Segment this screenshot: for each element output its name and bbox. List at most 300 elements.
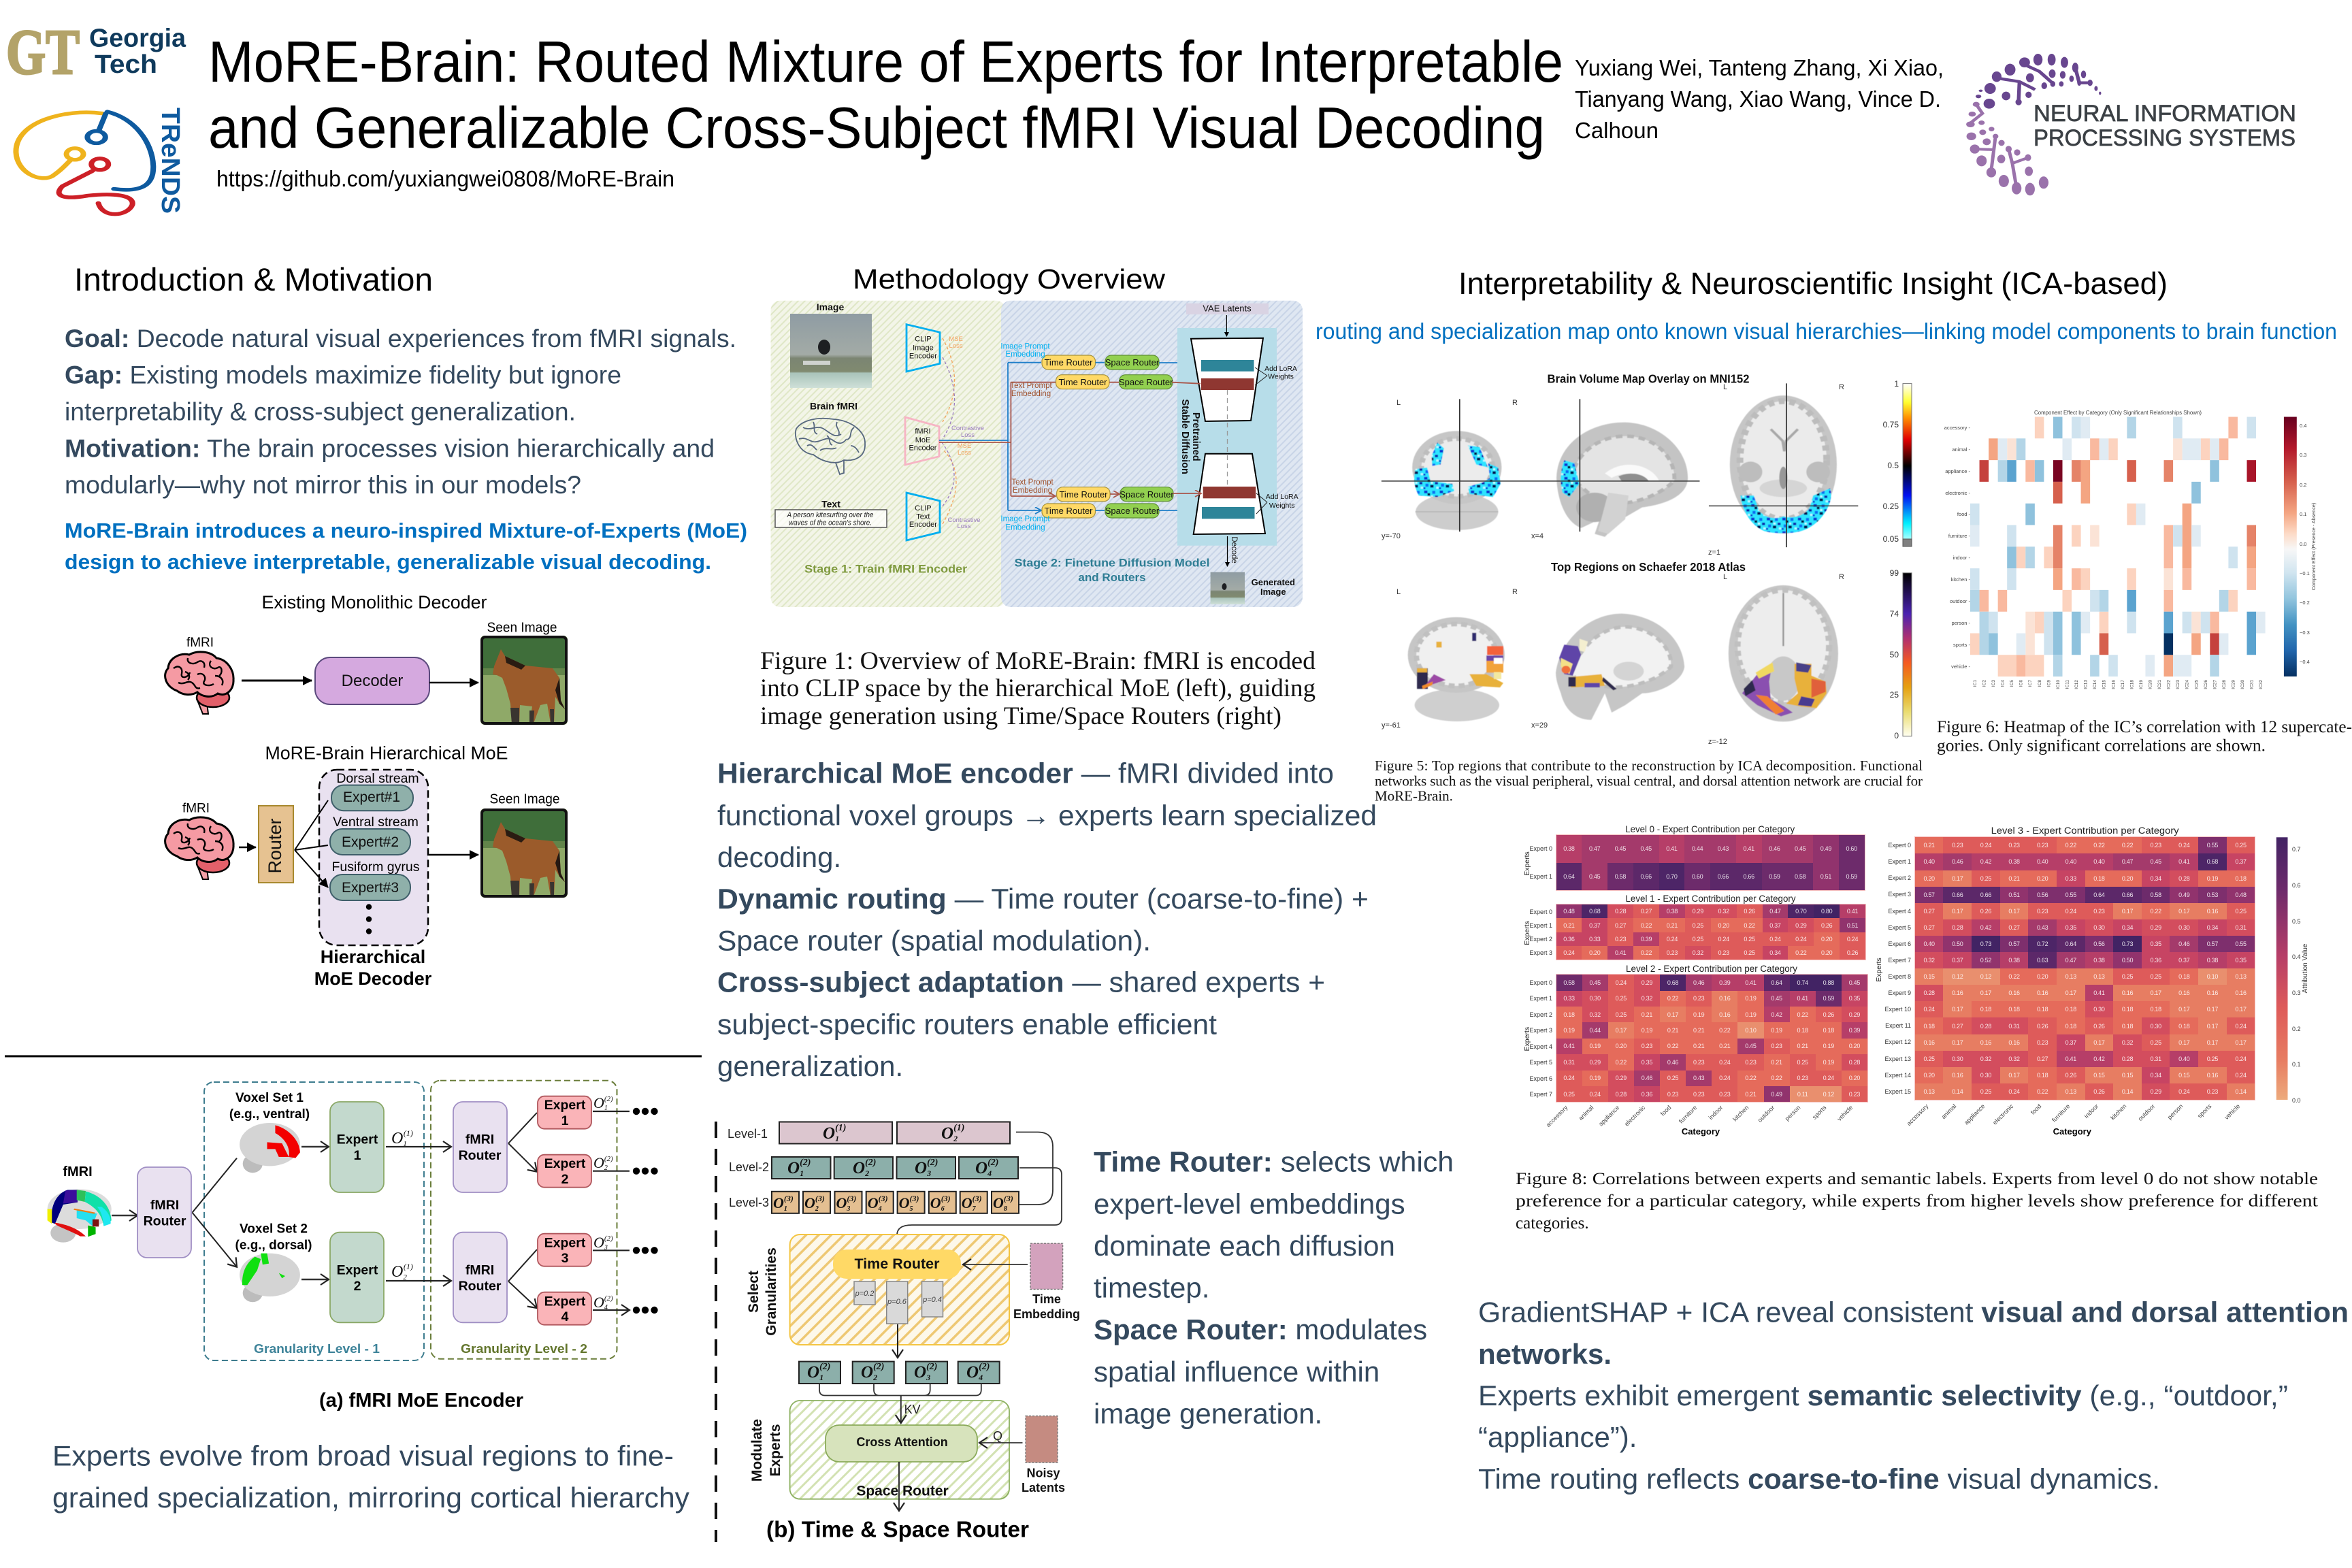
text block: time router and space router: image generation. (1094, 1398, 1322, 1429)
heatmap: level 2 expert contribution: 0.41 (1797, 995, 1808, 1002)
diagram: fMRI MoE encoder: (2) (604, 1235, 613, 1243)
chart labels: level heatmaps: Level 1 - Expert Contribution per Category (1625, 893, 1795, 904)
caption: figure 8 (1516, 1170, 2318, 1232)
heatmap: level 1 expert contribution: 0.24 (1795, 936, 1806, 943)
heatmap: level 3 expert contribution: 0.17 (1952, 875, 1963, 882)
text block: time router and space router: spatial influence within (1094, 1356, 1379, 1388)
heatmap: level 3 expert contribution: 0.32 (2122, 1039, 2133, 1046)
diagram: fMRI MoE encoder: (2) (604, 1294, 613, 1303)
heatmap: level 2 expert contribution: 0.24 (1590, 1091, 1601, 1098)
text block: time router and space router: dominate each diffusion (1094, 1230, 1395, 1262)
diagram: existing monolithic decoder (165, 592, 568, 725)
diagram: time and space router: Level-2 (729, 1160, 769, 1174)
diagram: time and space router: (2) (819, 1362, 830, 1372)
colorbar: atlas: 99 (1890, 568, 1899, 578)
chart: IC correlation heatmap: electronic - (1945, 490, 1970, 496)
time and space routers: Space Router (1105, 357, 1160, 368)
heatmap: level 3 expert contribution: 0.18 (2122, 1022, 2133, 1029)
caption: figure 6: Figure 6: Heatmap of the IC’s correlation with 12 supercate- (1937, 718, 2352, 736)
chart: brain volume maps: y=-61 (1382, 721, 1401, 730)
heatmap: level 3 expert contribution: 0.34 (2151, 1072, 2161, 1079)
heatmap: level 3 expert contribution: 0.16 (2235, 990, 2247, 996)
chart: IC correlation heatmap: IC18 (2129, 680, 2134, 689)
heatmap: level 2 expert contribution: 0.25 (1616, 1011, 1627, 1018)
diagram: pipeline overview: Contrastive (947, 517, 981, 524)
heatmap: level 2 expert contribution: 0.22 (1667, 1043, 1678, 1049)
heatmap: level 3 expert contribution: 0.55 (2207, 842, 2218, 849)
heatmap: level 2 expert contribution: 0.29 (1590, 1059, 1601, 1066)
chart labels: level heatmaps: sports (1811, 1104, 1828, 1121)
heatmap: level 1 expert contribution (1556, 904, 1866, 960)
heatmap: level 3 expert contribution: 0.24 (1980, 842, 1991, 849)
heatmap: level 0 expert contribution: 0.45 (1589, 873, 1600, 880)
callout: MoRE-Brain statement: MoRE-Brain introduces a neuro-inspired Mixture-of-Experts (MoE) (65, 519, 747, 542)
heatmap: level 1 expert contribution: 0.47 (1769, 908, 1781, 915)
caption: figure 1 (760, 647, 1316, 730)
diagram: fMRI MoE encoder: 1 (354, 1148, 361, 1163)
heatmap: level 3 expert contribution: 0.50 (1952, 941, 1963, 947)
heatmap: level 0 expert contribution: 0.70 (1666, 873, 1678, 880)
heatmap: level 2 expert contribution: 0.24 (1719, 1075, 1730, 1081)
heatmap: level 2 expert contribution: 0.12 (1823, 1091, 1834, 1098)
chart: IC correlation heatmap: IC30 (2240, 680, 2245, 689)
heatmap: level 2 expert contribution: 0.33 (1563, 995, 1575, 1002)
diagram: fMRI MoE encoder: (1) (404, 1128, 413, 1138)
text block: experts evolve: Experts evolve from broad visual regions to fine- (52, 1440, 674, 1471)
chart labels: level heatmaps: food (1659, 1104, 1672, 1117)
diagram: time and space router: O (861, 1363, 873, 1382)
heatmap: level 3 expert contribution: 0.18 (2065, 1006, 2076, 1013)
heatmap: level 3 expert contribution: 0.32 (2008, 1056, 2020, 1062)
chart labels: level heatmaps: Expert 11 (1885, 1022, 1911, 1029)
diagram: existing monolithic decoder: Seen Image (487, 621, 557, 636)
heatmap: level 2 expert contribution: 0.74 (1797, 979, 1808, 986)
heatmap: level 1 expert contribution: 0.20 (1718, 922, 1729, 929)
heatmap: level 1 expert contribution: 0.23 (1615, 936, 1626, 943)
diagram: time and space router: (2) (926, 1362, 937, 1372)
caption: figure 8: Figure 8: Correlations between experts and semantic labels. Experts from level 0 do not show notable (1516, 1170, 2318, 1188)
heatmap: level 3 expert contribution: 0.16 (1952, 990, 1963, 996)
heatmap: level 3 expert contribution: 0.64 (2093, 892, 2105, 898)
text block: hierarchical encoder, routing, adaptation: decoding. (717, 841, 841, 873)
heatmap: level 0 expert contribution: 0.60 (1692, 873, 1703, 880)
chart: IC correlation heatmap: IC11 (2065, 680, 2070, 689)
chart: IC correlation heatmap: accessory - (1944, 425, 1971, 431)
colorbar: attribution value: 0.5 (2292, 918, 2301, 925)
heatmap: level 3 expert contribution: 0.28 (2122, 1056, 2133, 1062)
heatmap: level 3 expert contribution: 0.17 (2178, 1039, 2189, 1046)
heatmap: level 3 expert contribution: 0.25 (2207, 1056, 2218, 1062)
diagram: time and space router: Modulate (749, 1419, 765, 1482)
diagram: fMRI MoE encoder: fMRI (466, 1132, 494, 1147)
heatmap: level 2 expert contribution: 0.23 (1642, 1043, 1652, 1049)
heatmap: level 3 expert contribution: 0.17 (2008, 908, 2020, 915)
chart labels: level heatmaps: sports (2196, 1102, 2213, 1120)
diagram: time and space router: 8 (1004, 1205, 1007, 1213)
heatmap: level 2 expert contribution: 0.30 (1590, 995, 1601, 1002)
heatmap: level 3 expert contribution: 0.18 (2235, 875, 2247, 882)
diagram: time and space router: 3 (926, 1169, 931, 1178)
github link: https://github.com/yuxiangwei0808/MoRE-Brain (216, 166, 674, 191)
heatmap: level 1 expert contribution: 0.20 (1821, 949, 1832, 956)
heatmap: level 2 expert contribution: 0.28 (1616, 1091, 1627, 1098)
diagram: pipeline overview: Text Prompt (1011, 478, 1054, 487)
chart labels: level heatmaps: Expert 5 (1888, 924, 1911, 931)
heatmap: level 3 expert contribution: 0.47 (2065, 957, 2076, 964)
diagram: pipeline overview: MSE (949, 336, 963, 343)
heatmap: level 3 expert contribution: 0.66 (2122, 892, 2133, 898)
diagram: fMRI MoE encoder: (e.g., ventral) (229, 1107, 310, 1122)
caption: figure 5: MoRE-Brain. (1375, 788, 1453, 804)
heatmap: level 3 expert contribution: 0.25 (1923, 1056, 1935, 1062)
heatmap: level 2 expert contribution: 0.24 (1719, 1059, 1730, 1066)
chart labels: level heatmaps: Category (2053, 1126, 2092, 1137)
diagram: time and space router: Noisy (1026, 1466, 1060, 1480)
heatmap: level 1 expert contribution: 0.34 (1769, 949, 1781, 956)
heatmap: level 3 expert contribution: 0.17 (2122, 908, 2133, 915)
colorbar: component effect: Component Effect (Presence - Absence) (2310, 503, 2317, 590)
heatmap: level 3 expert contribution: 0.26 (1980, 908, 1991, 915)
colorbar: volume overlay: 0.05 (1883, 534, 1899, 544)
chart labels: level heatmaps: Expert 4 (1888, 908, 1911, 915)
chart labels: level heatmaps: furniture (2051, 1102, 2071, 1124)
text block: hierarchical encoder, routing, adaptation: Dynamic routing — Time router (coarse-to-fine) + (717, 883, 1369, 915)
text block: goal, gap, motivation: modularly—why not mirror this in our models? (65, 471, 581, 499)
text block: experts evolve (52, 1440, 689, 1514)
colorbar: component effect (2284, 416, 2317, 676)
diagram: time and space router: (2) (927, 1158, 938, 1168)
heatmap: level 3 expert contribution: 0.20 (1923, 875, 1935, 882)
heatmap: level 2 expert contribution: 0.20 (1616, 1043, 1627, 1049)
diagram: hierarchical MoE decoder: MoE Decoder (314, 968, 432, 989)
chart: IC correlation heatmap: IC1 (1973, 680, 1978, 687)
logo: Georgia Tech: Tech (95, 50, 157, 79)
heatmap: level 3 expert contribution: 0.17 (2151, 990, 2161, 996)
heatmap: level 0 expert contribution: 0.46 (1769, 845, 1780, 852)
chart: IC correlation heatmap: IC13 (2084, 680, 2089, 689)
text block: hierarchical encoder, routing, adaptation: Hierarchical MoE encoder — fMRI divided into (717, 757, 1334, 789)
caption: figure 1: into CLIP space by the hierarchical MoE (left), guiding (760, 674, 1316, 702)
heatmap: level 3 expert contribution: 0.47 (2122, 858, 2133, 865)
diagram: fMRI MoE encoder: 1 (604, 1105, 608, 1112)
heatmap: level 3 expert contribution: 0.26 (2093, 1088, 2105, 1095)
colorbar: attribution value: 0.4 (2292, 953, 2301, 960)
chart labels: level heatmaps: Expert 8 (1888, 973, 1911, 980)
diagram: fMRI MoE encoder: fMRI (150, 1198, 179, 1213)
heatmap: level 3 expert contribution: 0.28 (1923, 990, 1935, 996)
heatmap: level 2 expert contribution: 0.26 (1823, 1011, 1834, 1018)
logo: NeurIPS (1966, 54, 2296, 195)
diagram: time and space router: (3) (847, 1194, 856, 1203)
heatmap: level 3 expert contribution: 0.37 (2235, 858, 2247, 865)
chart labels: level heatmaps: Experts (1523, 921, 1531, 945)
heatmap: level 2 expert contribution: 0.46 (1693, 979, 1704, 986)
heatmap: level 3 expert contribution: 0.30 (2151, 1022, 2161, 1029)
heatmap: level 2 expert contribution: 0.64 (1771, 979, 1782, 986)
icon: line brain (796, 419, 865, 474)
heatmap: level 3 expert contribution: 0.22 (2065, 842, 2076, 849)
encoders: Encoder (909, 444, 937, 453)
heatmap: level 2 expert contribution: 0.11 (1797, 1091, 1808, 1098)
chart labels: level heatmaps: Expert 1 (1888, 858, 1911, 865)
chart labels: level heatmaps: kitchen (2109, 1102, 2127, 1122)
encoders: Text (916, 513, 930, 521)
heatmap: level 3 expert contribution: 0.24 (2178, 842, 2189, 849)
encoders: MoE (915, 436, 930, 444)
colorbar: component effect: −0.3 (2300, 630, 2310, 636)
chart: IC correlation heatmap: kitchen - (1951, 576, 1970, 583)
heatmap: level 3 expert contribution: 0.50 (2122, 957, 2133, 964)
heatmap: level 3 expert contribution: 0.26 (2065, 1072, 2076, 1079)
heatmap: level 1 expert contribution: 0.29 (1693, 908, 1703, 915)
diagram: fMRI MoE encoder: Expert (337, 1263, 378, 1278)
heatmap: level 1 expert contribution: 0.24 (1667, 936, 1678, 943)
heatmap: level 3 expert contribution: 0.27 (1923, 908, 1935, 915)
chart: IC correlation heatmap: IC21 (2157, 680, 2162, 689)
diagram: time and space router: O (868, 1194, 879, 1211)
heatmap: level 2 expert contribution: 0.21 (1693, 1043, 1704, 1049)
heatmap: level 3 expert contribution: 0.21 (2008, 875, 2020, 882)
heatmap: level 1 expert contribution: 0.70 (1795, 908, 1806, 915)
heatmap: level 3 expert contribution: 0.38 (2008, 858, 2020, 865)
heatmap: level 3 expert contribution: 0.18 (2122, 1006, 2133, 1013)
heatmap: level 2 expert contribution: 0.18 (1563, 1011, 1575, 1018)
heatmap: level 3 expert contribution: 0.37 (1952, 957, 1963, 964)
heatmap: level 3 expert contribution: 0.40 (2178, 1056, 2189, 1062)
heatmap: level 3 expert contribution: 0.17 (2207, 1039, 2218, 1046)
heatmap: level 1 expert contribution: 0.48 (1563, 908, 1575, 915)
text block: time router and space router: expert-level embeddings (1094, 1188, 1405, 1220)
chart labels: level heatmaps: Expert 2 (1529, 1011, 1552, 1018)
heatmap: level 3 expert contribution: 0.31 (2151, 1056, 2161, 1062)
heatmap: level 3 expert contribution: 0.23 (2037, 1039, 2048, 1046)
chart: IC correlation heatmap: sports - (1953, 642, 1970, 648)
diagram: time and space router: O (993, 1194, 1004, 1211)
heatmap: level 3 expert contribution: 0.38 (2008, 957, 2020, 964)
chart: brain volume maps: L (1396, 399, 1401, 407)
diagram: pipeline overview: A person kitesurfing over the (787, 511, 874, 519)
chart labels: level heatmaps (1523, 823, 2241, 1137)
logo: NeurIPS: PROCESSING SYSTEMS (2034, 125, 2296, 151)
heatmap: level 3 expert contribution: 0.17 (2008, 1072, 2020, 1079)
panel: space router: Cross Attention (856, 1435, 948, 1449)
diagram: existing monolithic decoder: fMRI (186, 636, 214, 650)
heatmap: level 3 expert contribution: 0.16 (1952, 1072, 1963, 1079)
diagram: time and space router: Level-1 (728, 1127, 768, 1141)
pretrained stable diffusion: Stable Diffusion (1179, 399, 1190, 474)
chart labels: level heatmaps: outdoor (2137, 1102, 2156, 1122)
heatmap: level 3 expert contribution: 0.30 (2093, 1006, 2105, 1013)
heatmap: level 3 expert contribution: 0.18 (2178, 973, 2189, 980)
heatmap: level 3 expert contribution: 0.16 (2207, 990, 2218, 996)
chart labels: level heatmaps: Expert 0 (1529, 845, 1552, 852)
chart: brain volume maps: L (1396, 588, 1401, 596)
heatmap: level 3 expert contribution: 0.26 (2093, 1022, 2105, 1029)
heatmap: level 3 expert contribution: 0.33 (2065, 875, 2076, 882)
diagram: pipeline overview: Image Prompt (1000, 515, 1050, 523)
heatmap: level 3 expert contribution: 0.42 (1980, 924, 1991, 931)
heatmap: level 3 expert contribution: 0.58 (2151, 892, 2161, 898)
time and space routers: Space Router (1120, 489, 1174, 500)
chart: brain volume maps: z=-12 (1708, 738, 1727, 746)
heatmap: level 3 expert contribution: 0.48 (2235, 892, 2247, 898)
heatmap: level 2 expert contribution: 0.17 (1616, 1027, 1627, 1034)
brain map: axial atlas (1729, 585, 1838, 721)
photo: generated image (1211, 572, 1245, 604)
heatmap: level 1 expert contribution: 0.20 (1589, 949, 1600, 956)
chart: IC correlation heatmap: animal - (1952, 446, 1970, 453)
heatmap: level 3 expert contribution: 0.68 (2207, 858, 2218, 865)
diagram: time and space router: Q (993, 1429, 1002, 1443)
diagram: fMRI MoE encoder: Router (459, 1279, 502, 1294)
heatmap: level 1 expert contribution: 0.80 (1821, 908, 1832, 915)
diagram: pipeline overview: Embedding (1013, 487, 1052, 495)
heatmap: level 1 expert contribution: 0.20 (1821, 936, 1832, 943)
callout: MoRE-Brain statement: design to achieve interpretable, generalizable visual decoding. (65, 550, 711, 574)
heatmap: level 3 expert contribution: 0.17 (2178, 1006, 2189, 1013)
heatmap: level 2 expert contribution: 0.23 (1667, 1091, 1678, 1098)
text block: interpretability findings: “appliance”). (1478, 1421, 1637, 1453)
diagram: time and space router: 6 (941, 1205, 945, 1213)
title (208, 30, 1563, 161)
heatmap: level 3 expert contribution: 0.30 (1980, 1072, 1991, 1079)
heatmap: level 2 expert contribution: 0.19 (1745, 1011, 1757, 1018)
heatmap: level 0 expert contribution: 0.66 (1640, 873, 1652, 880)
chart: brain volume maps: L (1723, 383, 1727, 391)
heatmap: level 2 expert contribution: 0.29 (1849, 1011, 1860, 1018)
heatmap: level 3 expert contribution: 0.15 (2178, 1072, 2189, 1079)
diagram: time and space router: Latents (1022, 1481, 1065, 1494)
diagram: pipeline overview: Image (1260, 587, 1286, 597)
chart labels: level heatmaps: Expert 6 (1529, 1075, 1552, 1082)
heatmap: level 3 expert contribution: 0.17 (2235, 1006, 2247, 1013)
colorbar: attribution value: 0.7 (2292, 846, 2301, 853)
diagram: hierarchical MoE decoder: Router (265, 818, 285, 874)
diagram: fMRI MoE encoder: Router (144, 1214, 186, 1229)
pretrained stable diffusion: Add LoRA (1264, 365, 1297, 373)
chart labels: level heatmaps: appliance (1963, 1102, 1986, 1126)
panel: time router: p=0.2 (855, 1290, 874, 1298)
pretrained stable diffusion: Add LoRA (1266, 493, 1298, 501)
heatmap: level 3 expert contribution: 0.26 (2037, 1022, 2048, 1029)
heatmap: level 3 expert contribution: 0.17 (2178, 908, 2189, 915)
heatmap: level 3 expert contribution: 0.21 (1923, 842, 1935, 849)
heatmap: level 0 expert contribution: 0.58 (1615, 873, 1626, 880)
heatmap: level 1 expert contribution: 0.25 (1693, 936, 1703, 943)
chart: IC correlation heatmap: IC2 (1982, 680, 1987, 687)
chart: brain volume maps: R (1839, 573, 1844, 581)
chart: brain volume maps: x=29 (1531, 721, 1548, 730)
heading: Interpretability & Neuroscientific Insight: Interpretability & Neuroscientific Insight (ICA-based) (1458, 266, 2168, 301)
heatmap: level 2 expert contribution: 0.22 (1667, 995, 1678, 1002)
heatmap: level 1 expert contribution: 0.24 (1563, 949, 1575, 956)
title: and Generalizable Cross-Subject fMRI Visual Decoding (208, 96, 1545, 161)
heatmap: level 1 expert contribution: 0.32 (1693, 949, 1703, 956)
diagram: hierarchical MoE decoder: Hierarchical (321, 947, 425, 967)
diagram: time and space router: O (941, 1124, 953, 1143)
diagram: fMRI MoE encoder: 2 (403, 1273, 407, 1281)
heatmap: level 2 expert contribution: 0.29 (1616, 1075, 1627, 1081)
heatmap: level 3 expert contribution: 0.23 (1952, 842, 1963, 849)
chart: IC correlation heatmap (1944, 410, 2317, 689)
diagram: pipeline overview: Image Prompt (1000, 343, 1050, 351)
heatmap: level 2 expert contribution: 0.23 (1771, 1043, 1782, 1049)
chart labels: level heatmaps: food (2029, 1102, 2042, 1116)
heatmap: level 3 expert contribution: 0.28 (2178, 875, 2189, 882)
heatmap: level 3 expert contribution: 0.25 (2235, 842, 2247, 849)
heatmap: level 1 expert contribution: 0.24 (1769, 936, 1781, 943)
heatmap: level 2 expert contribution: 0.20 (1849, 1075, 1860, 1081)
heatmap: level 0 expert contribution: 0.41 (1743, 845, 1754, 852)
heatmap: level 2 expert contribution: 0.44 (1590, 1027, 1601, 1034)
chart labels: level heatmaps: Expert 15 (1884, 1088, 1911, 1095)
encoders: Encoder (909, 521, 937, 529)
heatmap: level 3 expert contribution: 0.22 (2151, 908, 2161, 915)
heatmap: level 3 expert contribution: 0.29 (2151, 924, 2161, 931)
text block: interpretability findings (1478, 1296, 2349, 1495)
colorbar: attribution value: 0.1 (2292, 1061, 2301, 1068)
heatmap: level 3 expert contribution: 0.14 (2122, 1088, 2133, 1095)
chart: IC correlation heatmap: indoor - (1953, 555, 1970, 561)
heatmap: level 1 expert contribution: 0.27 (1641, 908, 1652, 915)
heatmap: level 3 expert contribution: 0.13 (2065, 1088, 2076, 1095)
heatmap: level 2 expert contribution: 0.23 (1745, 1059, 1757, 1066)
heatmap: level 2 expert contribution: 0.19 (1745, 995, 1757, 1002)
heatmap: level 3 expert contribution: 0.10 (2207, 973, 2218, 980)
heatmap: level 3 expert contribution: 0.18 (2037, 1072, 2048, 1079)
diagram: time and space router: 3 (846, 1205, 850, 1213)
heatmap: level 3 expert contribution: 0.23 (2151, 842, 2161, 849)
heatmap: level 1 expert contribution: 0.68 (1589, 908, 1600, 915)
time and space routers: Time Router (1059, 489, 1108, 500)
heatmap: level 3 expert contribution: 0.17 (2093, 1039, 2105, 1046)
chart labels: level heatmaps: electronic (1623, 1104, 1647, 1128)
heatmap: level 2 expert contribution: 0.19 (1590, 1043, 1601, 1049)
heatmap: level 3 expert contribution: 0.17 (1952, 1006, 1963, 1013)
heatmap: level 2 expert contribution: 0.24 (1823, 1075, 1834, 1081)
diagram: fMRI MoE encoder: 4 (604, 1304, 608, 1311)
diagram: time and space router: 2 (864, 1169, 869, 1178)
diagram: fMRI MoE encoder: 3 (561, 1251, 569, 1266)
heatmap: level 3 expert contribution: 0.15 (1923, 973, 1935, 980)
heatmap: level 3 expert contribution: 0.16 (2207, 1072, 2218, 1079)
diagram: pipeline overview: Embedding (1005, 350, 1045, 359)
chart labels: level heatmaps: Expert 0 (1529, 909, 1552, 915)
chart: brain volume maps: L (1723, 573, 1727, 581)
diagram: time and space router: O (962, 1194, 973, 1211)
heatmap: level 3 expert contribution: 0.57 (1923, 892, 1935, 898)
diagram: fMRI MoE encoder: (2) (604, 1095, 613, 1103)
heatmap: level 1 expert contribution: 0.23 (1667, 949, 1678, 956)
chart: IC correlation heatmap: IC29 (2231, 680, 2236, 689)
text block: hierarchical encoder, routing, adaptation: Space router (spatial modulation). (717, 925, 1151, 957)
diagram: hierarchical MoE decoder: Seen Image (490, 792, 559, 807)
heatmap: level 3 expert contribution: 0.24 (2178, 1088, 2189, 1095)
text block: hierarchical encoder, routing, adaptation: functional voxel groups → experts learn specialized (717, 799, 1377, 831)
chart: brain volume maps: R (1512, 588, 1518, 596)
heatmap: level 3 expert contribution: 0.20 (2037, 875, 2048, 882)
diagram: hierarchical MoE decoder: fMRI (182, 802, 210, 815)
diagram: time and space router: 1 (800, 1169, 804, 1178)
text block: goal, gap, motivation: Gap: Existing models maximize fidelity but ignore (65, 361, 621, 389)
time and space routers: Time Router (1044, 357, 1093, 368)
heatmap: level 1 expert contribution: 0.27 (1615, 922, 1626, 929)
colorbar: atlas: 74 (1890, 609, 1899, 619)
chart: brain volume maps: R (1839, 383, 1844, 391)
chart: IC correlation heatmap: IC26 (2204, 680, 2208, 689)
heatmap: level 3 expert contribution: 0.36 (2151, 957, 2161, 964)
heatmap: level 3 expert contribution: 0.46 (1952, 858, 1963, 865)
